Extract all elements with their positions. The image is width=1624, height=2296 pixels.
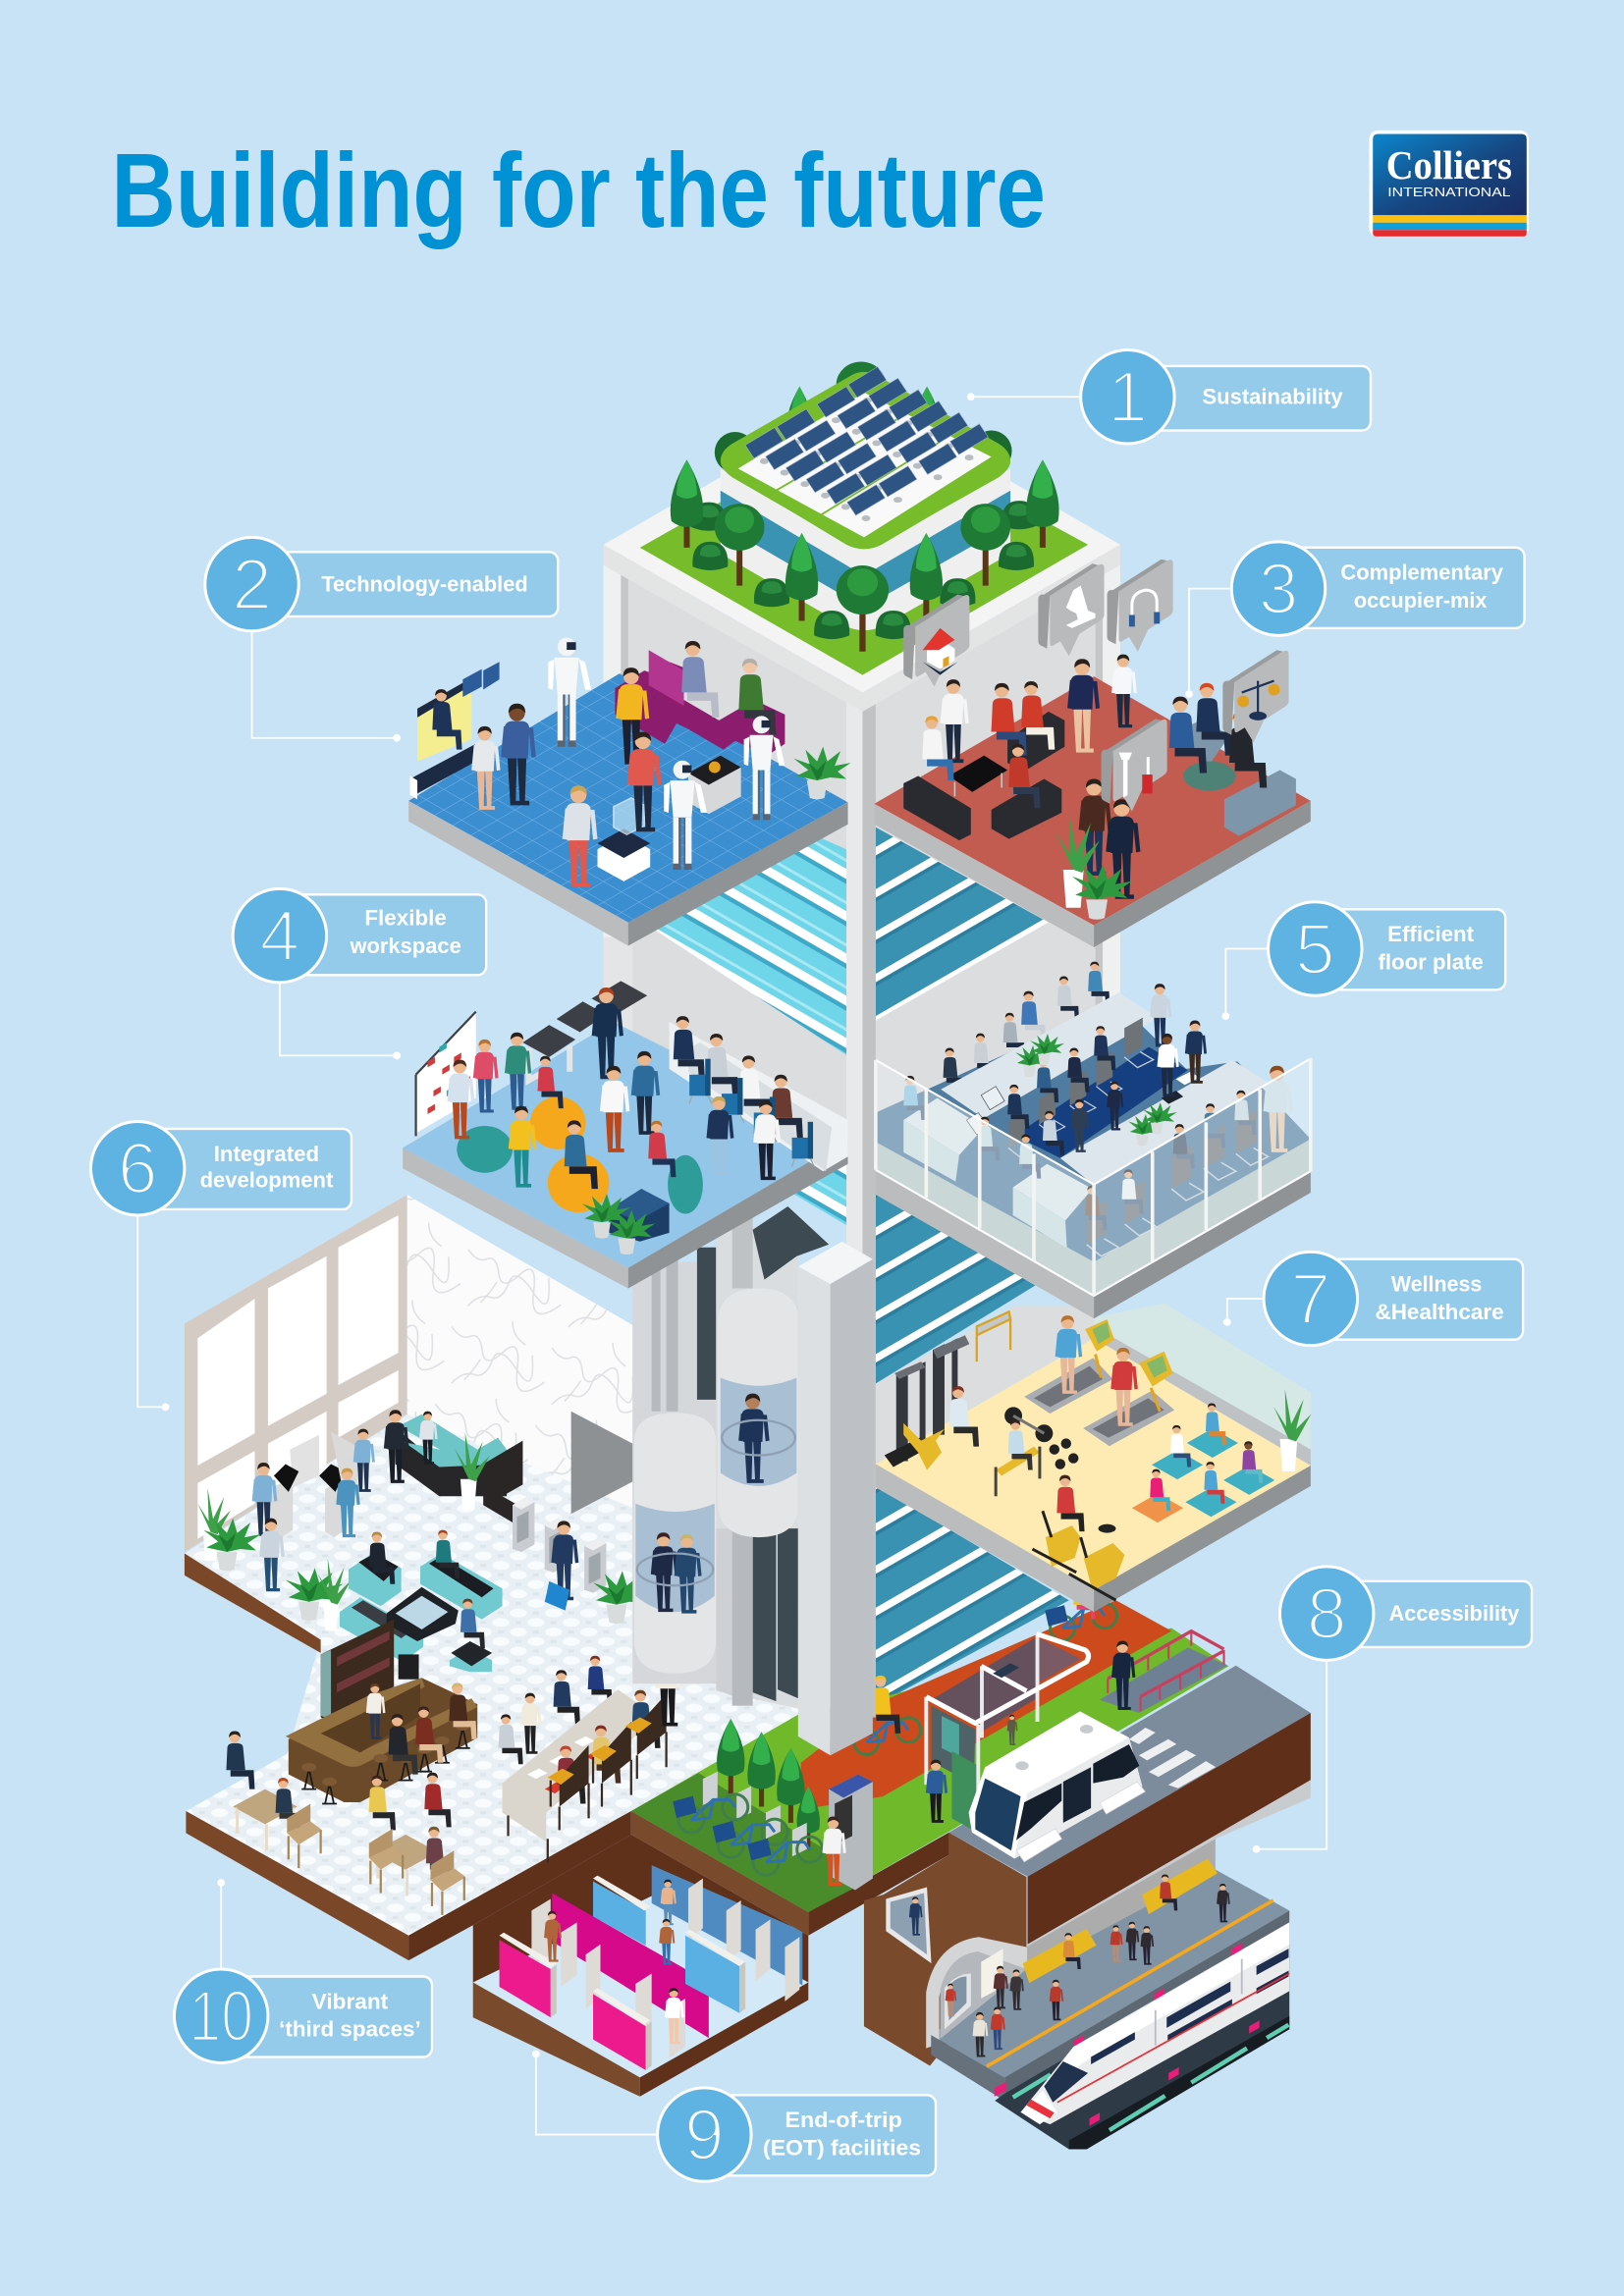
glass partition [876,1058,1311,1296]
tech floor [408,673,848,923]
hologram cube [598,798,650,881]
meeting group and sofa [1169,683,1296,836]
train [1021,1922,1289,2124]
bike share station [673,1719,873,1891]
cyclists [848,1575,1117,1754]
callout 10: vibrant third spaces: 10 [189,1977,253,2056]
panel 4: flexible workspace [403,981,848,1289]
green slab [631,1811,808,1936]
capsule lift front [634,1413,716,1674]
icon tags: occupier types [903,560,1288,811]
callout 7: wellness and healthcare: Wellness [1391,1272,1482,1297]
cafe tables [226,1732,465,1915]
callout 6: integrated development: Integrated [214,1142,319,1166]
robot cart [688,756,741,814]
weights bench [996,1407,1078,1496]
panel 9: end-of-trip facilities [473,1835,808,2097]
tech slab [408,801,628,946]
callout 5: efficient floor plate: floor plate [1378,949,1484,974]
callout 4: flexible workspace: Flexible [364,906,447,931]
occupier plants [1056,811,1132,920]
callout 5: efficient floor plate [1221,902,1505,1020]
callout 9: end-of-trip facilities: (EOT) facilities [763,2135,921,2160]
gym slab [876,1465,1094,1612]
panel 2: technology-enabled [408,638,851,946]
lounge black sofas [903,712,1064,840]
station side window [886,1888,932,1963]
treadmills [1024,1315,1174,1446]
callout 2: technology-enabled: 2 [232,546,272,625]
occupier floor [874,676,1311,926]
callout 5: efficient floor plate: 5 [1295,910,1335,989]
bar shelf [321,1620,394,1721]
roof garden [603,361,1120,712]
lobby slabs [185,1553,631,1960]
logo: Colliers International: Colliers [1386,143,1512,188]
roof lawn [640,422,1088,675]
workspace floor [403,1022,848,1268]
lounge sofas [340,1530,503,1672]
green lawn [631,1629,1228,1912]
upper deck [721,372,1010,549]
callout 9: end-of-trip facilities: 9 [684,2096,725,2175]
track [995,1927,1289,2149]
callout 4: flexible workspace: workspace [349,934,461,958]
conference tables [903,992,1270,1249]
lobby plants [197,1488,650,1631]
callout 10: vibrant third spaces [174,1879,432,2062]
callout 10: vibrant third spaces: ‘third spaces’ [279,2017,421,2042]
meeting floor [876,1003,1311,1262]
callout 4: flexible workspace: 4 [260,896,299,976]
bar [286,1620,477,1804]
title: Building for the future [111,132,1046,249]
callout 6: integrated development [90,1122,352,1411]
meeting slab [876,1170,1094,1318]
lockers [500,1876,745,2070]
core walls [632,1206,829,1709]
callout 7: wellness and healthcare [1223,1252,1523,1346]
callout 3: complementary occupier-mix [1185,542,1525,698]
panel 6: lobby integrated development [185,1195,798,1960]
workspace people [448,1033,781,1255]
cycle path [801,1600,1171,1809]
callout 2: technology-enabled: Technology-enabled [321,572,528,597]
tall column [798,1242,873,1755]
road [948,1666,1311,1877]
callout 5: efficient floor plate: Efficient [1387,922,1475,946]
ground level: street [631,1575,1311,2149]
callout 9: end-of-trip facilities [532,2051,936,2181]
purple sofa [615,641,785,756]
panel 7: wellness & healthcare [876,1303,1311,1612]
logo: Colliers International: INTERNATIONAL [1387,186,1511,199]
EOT slab and floor [473,1896,808,2097]
bus shelter [926,1634,1089,1833]
dining table [499,1645,683,1862]
front trees [671,459,1059,652]
callout 1: sustainability: Sustainability [1202,385,1343,409]
callout 8: accessibility [1253,1567,1532,1853]
back trees [715,361,1012,473]
icon: headset [1108,560,1173,652]
callout 4: flexible workspace [233,888,486,1059]
workspace slab [403,1148,628,1289]
station benches [1023,1858,1218,1983]
callout 2: technology-enabled [205,537,558,742]
callout 8: accessibility: Accessibility [1389,1601,1520,1626]
icon: microscope [1038,563,1105,656]
lobby people [252,1429,578,1611]
station brown [864,1833,1026,2065]
panel 5: efficient floor plate [876,962,1311,1318]
turnstiles [513,1498,606,1593]
bar counter [289,1678,477,1802]
station platform [926,1839,1289,2101]
setback block [721,468,1010,630]
yoga mats [1132,1389,1311,1522]
callout 9: end-of-trip facilities: End-of-trip [785,2108,902,2132]
lobby window wall [185,1195,407,1552]
kiosks [269,1432,357,1537]
back row people [944,962,1110,1093]
bathers [544,1880,684,2044]
icon: tools [1102,719,1167,811]
conference people [903,984,1293,1256]
lobby marble wall [407,1195,632,1508]
callout 3: complementary occupier-mix: Complementary [1340,561,1504,585]
occupier slab [874,804,1094,947]
station people [909,1874,1230,2057]
tower back walls [603,545,1120,1171]
turnstile wall [571,1412,632,1514]
window stripes [650,828,1069,1706]
meeting lower edge [876,1139,1311,1296]
exercise bikes [1032,1475,1124,1600]
callout 1: sustainability: 1 [1108,358,1148,438]
panel 3: complementary occupier-mix [874,655,1311,947]
callout 3: complementary occupier-mix: 3 [1259,550,1298,629]
whiteboard [416,1012,476,1136]
solar panels [745,367,988,521]
roof frame [603,396,1120,693]
gym glass wall [1094,1303,1311,1450]
bus [969,1711,1145,1862]
lobby floor [185,1415,798,1936]
crosswalk [1129,1728,1216,1789]
centre column [846,693,876,1718]
elevator core [632,1206,829,1709]
callout 10: vibrant third spaces: Vibrant [312,1989,389,2013]
callout 8: accessibility: 8 [1307,1575,1347,1654]
gym floor [876,1338,1311,1590]
callout 7: wellness and healthcare: 7 [1291,1259,1330,1339]
meeting carpet [1014,1046,1188,1158]
hot desks [522,981,647,1081]
accessible ramp [1100,1631,1227,1713]
EOT brown back [473,1835,808,1982]
callout 1: sustainability [967,350,1371,444]
road section [1028,1713,1311,1945]
lounge people [922,655,1140,899]
video wall [410,662,500,799]
reception desk [384,1410,522,1528]
gym back wall [876,1306,1094,1465]
callout 6: integrated development: 6 [118,1130,158,1209]
capsule lift rear [718,1289,799,1537]
shower cubicles [531,1879,799,2058]
workspace bench [670,1016,848,1171]
magenta wall [552,1893,709,2038]
bean bags [457,1096,703,1242]
tech people and robots [471,638,851,887]
gym machines [885,1311,1010,1469]
logo: Colliers International [1369,131,1529,238]
icon: house [903,595,969,687]
callout 6: integrated development: development [200,1168,334,1193]
callout 3: complementary occupier-mix: occupier-mix [1354,588,1488,613]
blue wall [652,1865,802,1985]
callout 7: wellness and healthcare: &Healthcare [1375,1300,1504,1324]
icon: scales [1222,650,1288,742]
